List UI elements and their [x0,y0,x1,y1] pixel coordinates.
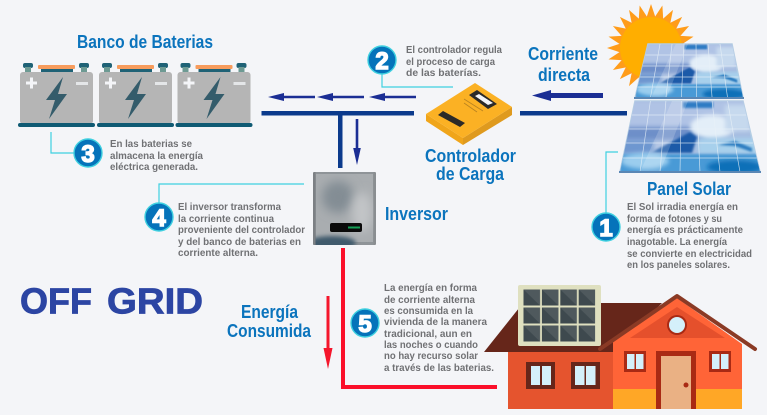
step 5 callout [351,283,494,374]
main DC wiring [262,111,627,168]
heading: Corriente directa [528,44,598,85]
heading: Corriente directa: Corriente [528,44,598,64]
battery 1 [18,63,95,127]
arrow: down to inverter [353,119,361,165]
icon: charge controller [426,83,512,145]
step 1 callout: energía es prácticamente [627,225,743,236]
heading: Controlador de Carga [425,146,516,184]
step 1 callout: 1 [599,215,613,242]
heading: Controlador de Carga: Controlador [425,146,516,166]
title: OFF GRID: GRID [107,280,203,322]
step 3 callout: 3 [81,141,95,168]
icon: solar panel top [634,44,747,99]
icon: solar panel bottom [619,101,765,174]
step 5 callout: de corriente alterna [384,295,475,306]
step 4 callout: 4 [152,205,166,232]
step 5 callout: La energía en forma [384,283,477,294]
heading: Energía Consumida: Consumida [227,321,312,341]
title: OFF GRID [20,280,203,322]
step 2 callout: El controlador regula [406,45,502,56]
arrow: energy consumed [324,296,332,369]
battery 2 [97,63,174,127]
AC wiring to house [343,248,497,387]
step 5 callout: es consumida en la [384,306,473,317]
heading: Panel Solar: Panel Solar [647,179,731,199]
house rooftop solar panel [518,285,601,346]
title: OFF GRID: OFF [20,280,92,322]
step 1 callout: forma de fotones y su [627,214,722,225]
battery 3 [176,63,252,127]
step 5 callout: vivienda de la manera [384,317,487,328]
step 5 callout: 5 [358,311,372,338]
step 5 callout: no hay recurso solar [384,351,478,362]
step 3 callout [51,132,203,173]
heading: Corriente directa: directa [538,65,591,85]
step 1 callout: inagotable. La energía [627,237,727,248]
step 2 callout: 2 [375,48,389,75]
arrow: panel to controller [532,90,603,101]
icon: house [484,285,755,409]
step 3 callout: En las baterias se [110,139,192,150]
step 4 callout [145,184,305,259]
icon: inverter [313,172,376,245]
step 2 callout: de las baterías. [406,68,481,79]
heading: Energía Consumida: Energía [241,302,299,322]
step 4 callout: proveniente del controlador [178,225,305,236]
heading: Controlador de Carga: de Carga [436,164,505,184]
arrows: controller to batteries [268,93,416,101]
heading: Banco de Baterias: Banco de Baterias [77,32,213,52]
heading: Inversor: Inversor [385,204,448,224]
step 1 callout: en los paneles solares. [627,260,730,271]
step 3 callout: eléctrica generada. [110,162,198,173]
step 1 callout: se convierte en electricidad [627,249,752,260]
step 2 callout: el proceso de carga [406,57,495,68]
step 5 callout: a través de las baterias. [384,363,494,374]
step 1 callout: El Sol irradia energía en [627,202,738,213]
step 3 callout: almacena la energía [110,151,203,162]
step 4 callout: El inversor transforma [178,202,281,213]
heading: Energía Consumida [227,302,312,341]
step 5 callout: tradicional, aun en [384,329,472,340]
step 4 callout: corriente alterna. [178,248,258,259]
icon: sun [607,4,695,92]
step 4 callout: y del banco de baterias en [178,237,301,248]
battery bank [18,63,252,127]
step 4 callout: la corriente continua [178,214,274,225]
step 1 callout [592,152,752,271]
step 2 callout [368,45,502,87]
step 5 callout: las noches o cuando [384,340,478,351]
